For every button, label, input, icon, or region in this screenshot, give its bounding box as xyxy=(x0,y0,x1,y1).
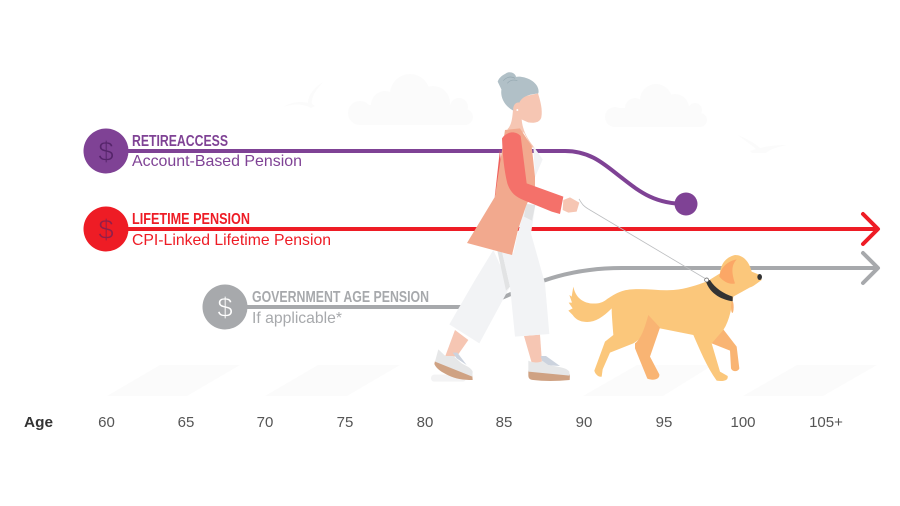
far front leg xyxy=(712,329,739,371)
axis tick labels: 85 xyxy=(496,414,512,431)
axis tick labels: 75 xyxy=(337,414,353,431)
subheading: If applicable: If applicable* xyxy=(252,310,342,327)
dog collar xyxy=(706,280,733,301)
label: Government Age Pension xyxy=(202,284,429,330)
label: RetireAccess xyxy=(84,128,302,174)
upper body xyxy=(467,72,579,255)
illustration: woman walking xyxy=(431,72,579,382)
purple line: RetireAccess xyxy=(106,151,698,216)
axis tick labels: 65 xyxy=(178,414,194,431)
dog tag xyxy=(731,301,734,313)
cloud left xyxy=(348,74,473,125)
axis tick labels: 70 xyxy=(257,414,273,431)
heading: Government Age Pension: GOVERNMENT AGE PENSION xyxy=(252,289,429,306)
axis tick labels xyxy=(98,414,843,431)
icon: purple dollar coin xyxy=(84,128,128,174)
axis tick labels: 95 xyxy=(656,414,672,431)
ground shadows xyxy=(107,365,877,396)
bird left xyxy=(283,82,323,108)
bird right xyxy=(738,135,787,153)
heading: RetireAccess: RETIREACCESS xyxy=(132,133,228,150)
subheading: Account-Based Pension: Account-Based Pension xyxy=(132,153,302,170)
leash xyxy=(579,199,706,279)
icon: purple dollar coin: $ xyxy=(98,136,114,167)
dog body xyxy=(568,255,762,381)
axis tick labels: 105+ xyxy=(809,414,843,431)
icon: grey dollar coin xyxy=(202,284,248,330)
icon: red dollar coin: $ xyxy=(98,214,114,245)
cloud right xyxy=(605,84,707,127)
axis title: Age xyxy=(24,414,53,431)
axis tick labels: 100 xyxy=(730,414,756,431)
illustration: dog xyxy=(568,255,762,381)
dog nose xyxy=(757,274,762,280)
far hind leg xyxy=(635,315,660,380)
dog ear xyxy=(719,259,737,284)
icon: grey dollar coin: $ xyxy=(217,292,233,323)
axis tick labels: 80 xyxy=(417,414,433,431)
shoe shadow and legs xyxy=(431,230,570,382)
label: Lifetime Pension xyxy=(84,206,331,252)
red line with arrow: Lifetime Pension xyxy=(106,214,878,244)
subheading: CPI-Linked Lifetime Pension: CPI-Linked Lifetime Pension xyxy=(132,232,331,249)
grey line with arrow: Government Age Pension xyxy=(225,253,878,307)
axis tick labels: 90 xyxy=(576,414,592,431)
icon: red dollar coin xyxy=(84,206,128,252)
age axis xyxy=(24,414,843,431)
heading: Lifetime Pension: LIFETIME PENSION xyxy=(132,211,250,228)
axis tick labels: 60 xyxy=(98,414,115,431)
